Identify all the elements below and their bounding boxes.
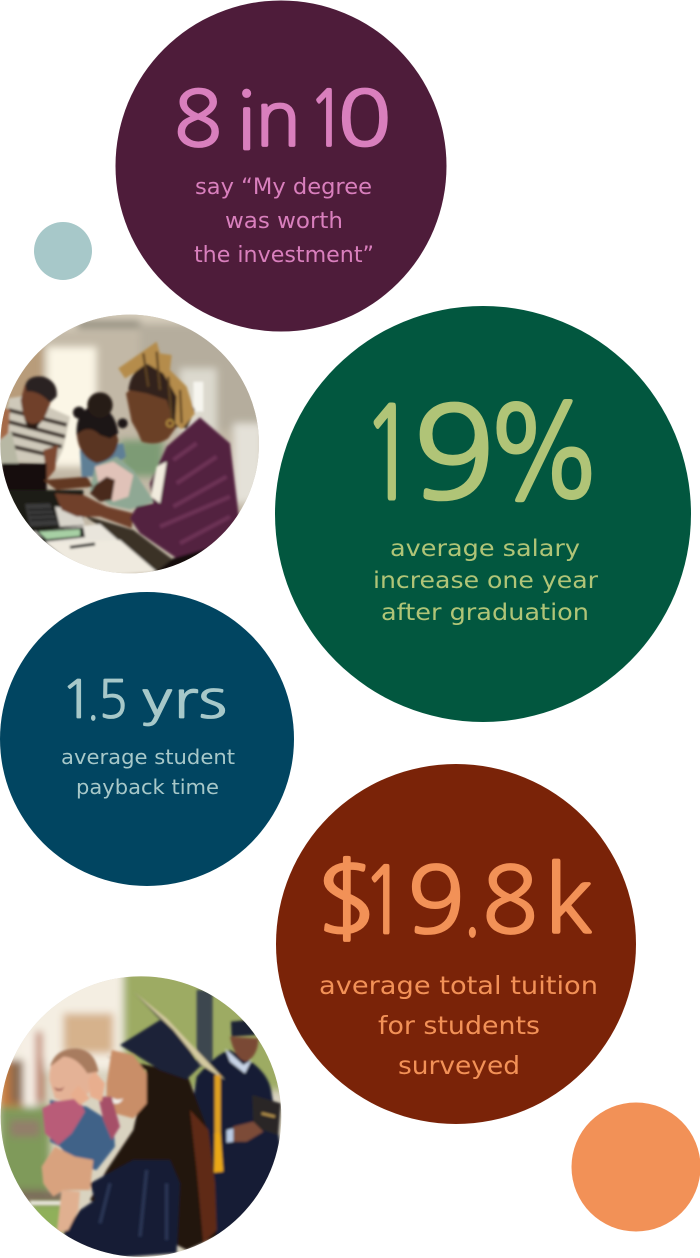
stat: $19.8k: $ <box>314 855 378 947</box>
stat: 19%: 1 <box>362 390 416 518</box>
stat: 1.5 yrs: 1 <box>60 674 94 726</box>
stat: 8 in 10: in <box>237 81 301 158</box>
hair <box>90 1057 217 1250</box>
stat: 8 in 10: 1 <box>308 81 346 158</box>
stat: $19.8k: . <box>463 855 481 947</box>
caption: average salary increase <box>373 536 599 626</box>
stat: 19%: % <box>484 390 604 518</box>
counter <box>85 515 174 572</box>
man in background <box>193 1050 280 1237</box>
caption: average salary increase: average salary <box>390 536 580 562</box>
panel: 19% stat <box>275 306 691 722</box>
stat: 8 in 10: 0 <box>338 81 392 158</box>
kid left <box>0 407 10 440</box>
caption: average total tuition: average total tuition <box>319 971 598 1000</box>
tassel <box>215 1075 221 1137</box>
caption: average student payback time: average student <box>61 745 235 769</box>
caption: average salary increase: increase one year <box>373 568 599 594</box>
woman head <box>126 383 180 444</box>
hands and leg <box>42 1147 93 1197</box>
decorative circle: orange <box>572 1102 700 1232</box>
caption: my degree was worth the investment: was worth <box>225 209 343 234</box>
gown <box>63 1160 180 1258</box>
panel: 1.5 yrs stat <box>0 592 294 886</box>
caption: my degree was worth the investment: say “My degree <box>195 175 372 200</box>
stat: $19.8k: k <box>544 855 594 947</box>
panel: $19.8k stat <box>276 764 636 1124</box>
stat: 19%: 9 <box>413 390 495 518</box>
face <box>107 1050 147 1118</box>
caption: my degree was worth the investment: the investment” <box>194 243 374 268</box>
stat: $19.8k: 9 <box>407 855 465 947</box>
stat: 1.5 yrs: 5 <box>98 674 128 726</box>
woman cardigan <box>130 417 239 558</box>
caption: average total tuition <box>319 971 598 1080</box>
stat: $19.8k: 8 <box>482 855 538 947</box>
girl body <box>80 443 126 477</box>
caption: average total tuition: for students <box>378 1011 540 1040</box>
caption: average salary increase: after graduation <box>381 600 589 626</box>
caption: average student payback time: payback time <box>76 775 219 799</box>
baby <box>48 1056 97 1102</box>
stat: 1.5 yrs: yrs <box>141 674 227 726</box>
laptop <box>2 463 47 495</box>
caption: my degree was worth the investment <box>194 175 374 268</box>
stat: 8 in 10: 8 <box>174 81 222 158</box>
girl head <box>77 423 118 463</box>
photo: family at laptop <box>0 310 267 577</box>
man <box>7 396 70 463</box>
decorative circle: teal <box>34 222 92 280</box>
caption: average student payback time <box>61 745 235 799</box>
stat: 1.5 yrs: . <box>87 674 99 726</box>
photo: graduate holding baby <box>0 970 290 1258</box>
woman arm and hands <box>55 493 133 528</box>
stat: $19.8k: 1 <box>362 855 406 947</box>
papers <box>33 522 119 545</box>
caption: average total tuition: surveyed <box>398 1051 520 1080</box>
panel: 8 in 10 stat <box>116 0 446 332</box>
cap <box>120 1020 200 1079</box>
